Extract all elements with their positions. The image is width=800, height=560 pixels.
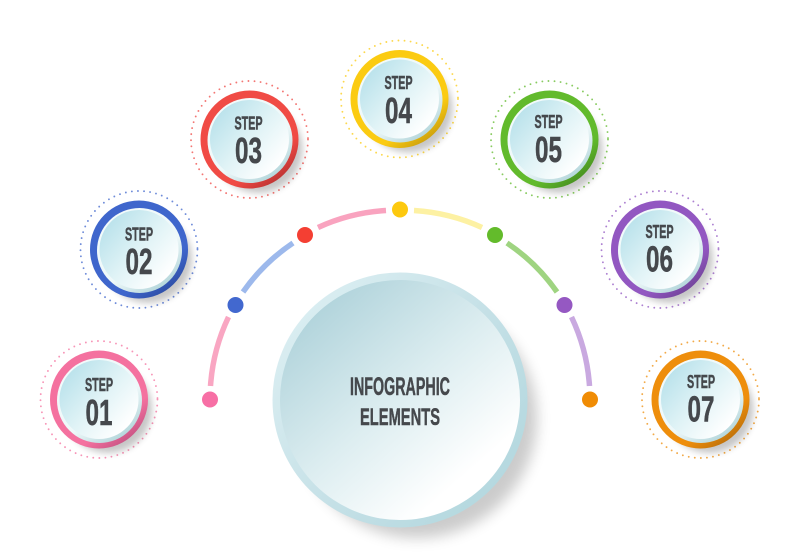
step 7	[642, 341, 759, 458]
label: STEP	[234, 114, 262, 134]
number: 01	[86, 392, 112, 433]
central circle	[272, 272, 537, 538]
central rim	[272, 272, 528, 528]
shadow	[64, 365, 152, 453]
shadow	[364, 64, 452, 152]
face	[661, 360, 740, 439]
arc segment 1	[210, 317, 228, 386]
label: STEP	[85, 375, 113, 395]
ring	[652, 350, 750, 448]
face	[510, 100, 589, 179]
ring	[90, 200, 188, 298]
node 1	[202, 392, 218, 408]
step 5	[491, 81, 608, 198]
label: STEP	[646, 222, 674, 242]
central title	[350, 373, 450, 431]
face	[360, 60, 439, 138]
dotted halo	[40, 341, 158, 458]
shadow	[214, 105, 302, 193]
central title: INFOGRAPHIC	[350, 373, 450, 401]
arc segment 6	[572, 317, 590, 386]
rim	[618, 208, 703, 293]
ring	[500, 90, 598, 188]
ring	[350, 50, 448, 148]
central shadow	[297, 298, 537, 538]
ring	[50, 350, 148, 448]
shadow	[514, 105, 602, 193]
node 5	[487, 227, 503, 243]
dotted halo	[491, 81, 608, 198]
dotted halo	[341, 40, 458, 158]
face	[100, 210, 178, 289]
number: 07	[688, 388, 714, 430]
rim	[658, 358, 744, 443]
arc node dots	[202, 202, 598, 408]
node 4	[392, 202, 408, 218]
shadow	[666, 365, 754, 453]
step 6	[602, 191, 718, 308]
number: 03	[235, 130, 262, 171]
dotted halo	[602, 191, 718, 308]
rim	[97, 208, 182, 293]
label: STEP	[384, 73, 412, 93]
arc segment 4	[414, 210, 482, 228]
arc segment 5	[507, 243, 557, 292]
step 4	[341, 40, 458, 158]
label: STEP	[687, 372, 715, 392]
step 2	[80, 191, 198, 308]
ring	[200, 90, 298, 188]
arc segment 3	[318, 210, 386, 228]
face	[60, 360, 138, 439]
node 3	[297, 227, 313, 243]
central face	[280, 280, 520, 520]
face	[210, 100, 289, 179]
rim	[508, 98, 592, 183]
number: 04	[385, 90, 412, 131]
face	[620, 210, 700, 289]
shadow	[104, 215, 192, 303]
node 6	[556, 297, 572, 313]
node 7	[582, 392, 598, 408]
label: STEP	[534, 112, 562, 132]
rim	[57, 358, 142, 443]
shadow	[625, 215, 713, 303]
ring	[611, 200, 709, 298]
number: 02	[126, 241, 152, 282]
step 3	[191, 81, 308, 198]
dotted halo	[642, 341, 759, 458]
dotted halo	[80, 191, 198, 308]
arc segment 2	[243, 243, 293, 292]
node 2	[228, 297, 244, 313]
rim	[358, 58, 442, 142]
number: 05	[535, 129, 562, 170]
dotted halo	[191, 81, 308, 198]
central title: ELEMENTS	[360, 404, 440, 431]
arc timeline	[210, 210, 590, 386]
label: STEP	[125, 224, 153, 244]
number: 06	[646, 238, 673, 280]
step 1	[40, 341, 158, 458]
rim	[208, 98, 292, 183]
